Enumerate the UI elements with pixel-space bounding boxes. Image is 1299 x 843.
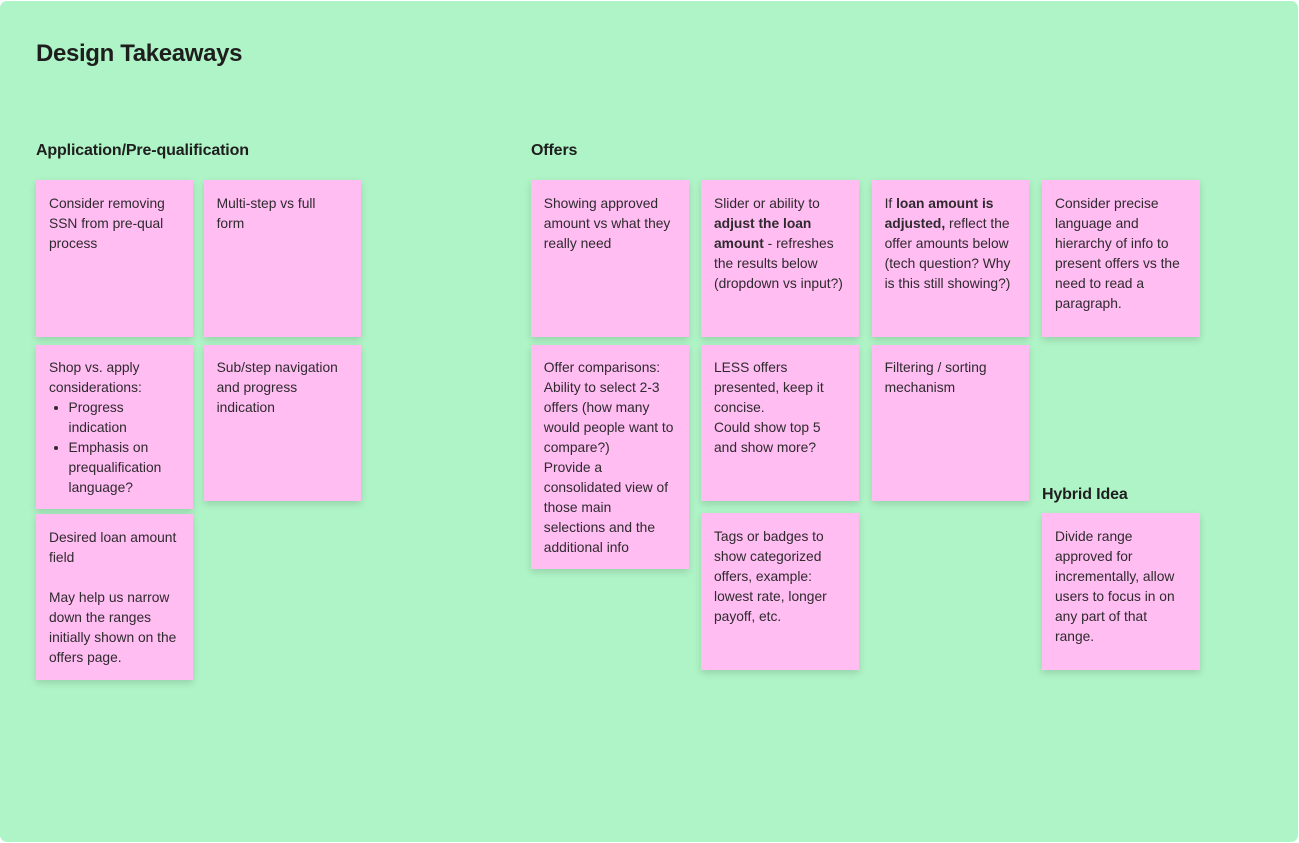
sticky: precise language: hierarchy of info to (1055, 236, 1169, 251)
sticky: less offers: concise. (714, 400, 765, 415)
sticky: offer comparisons (531, 344, 689, 569)
sticky: remove SSN: process (49, 236, 97, 251)
title: Design Takeaways (36, 40, 242, 67)
sticky: tags or badges: lowest rate, longer (714, 589, 827, 604)
sticky: loan amount adjusted: offer amounts below (885, 236, 1009, 251)
sticky: divide range: Divide range (1055, 529, 1132, 544)
sticky: slider (701, 180, 859, 337)
sticky: divide range: users to focus in on (1055, 589, 1175, 604)
heading: offers: Offers (531, 142, 577, 159)
sticky: tags or badges (701, 513, 859, 670)
sticky: slider: adjust the loan (714, 216, 811, 231)
sticky: slider: Slider or ability to (714, 196, 820, 211)
sticky: tags or badges: show categorized (714, 549, 821, 564)
sticky: multi-step: Multi-step vs full (217, 196, 316, 211)
sticky: loan amount adjusted: (tech question? Why (885, 256, 1010, 271)
sticky: desired loan amount: offers page. (49, 650, 122, 665)
sticky: divide range: incrementally, allow (1055, 569, 1174, 584)
sticky: filtering (872, 344, 1029, 501)
sticky: shop vs apply: Shop vs. apply (49, 360, 140, 375)
sticky: shop vs apply: language? (68, 480, 133, 495)
sticky: offer comparisons: additional info (544, 540, 629, 555)
sticky: shop vs apply: indication (68, 420, 127, 435)
sticky: approved amount: Showing approved (544, 196, 658, 211)
sticky: approved amount (531, 180, 689, 337)
sticky: approved amount: amount vs what they (544, 216, 670, 231)
sticky: desired loan amount: May help us narrow (49, 590, 169, 605)
sticky: divide range: range. (1055, 629, 1094, 644)
sticky: offer comparisons: selections and the (544, 520, 655, 535)
sticky: desired loan amount: Desired loan amount (49, 530, 176, 545)
sticky: loan amount adjusted: is this still showing?) (885, 276, 1010, 291)
sticky: sub/step navigation (204, 344, 361, 501)
sticky: sub/step navigation: and progress (217, 380, 297, 395)
sticky: precise language: Consider precise (1055, 196, 1159, 211)
sticky: remove SSN: SSN from pre-qual (49, 216, 163, 231)
sticky: less offers: presented, keep it (714, 380, 824, 395)
sticky: remove SSN (36, 180, 193, 337)
sticky: precise language: present offers vs the (1055, 256, 1180, 271)
sticky: offer comparisons: Provide a (544, 460, 602, 475)
sticky: shop vs apply: Emphasis on (68, 440, 148, 455)
sticky: slider: amount - refreshes (714, 236, 834, 251)
sticky: tags or badges: offers, example: (714, 569, 812, 584)
sticky: shop vs apply (36, 344, 193, 509)
sticky: offer comparisons: offers (how many (544, 400, 649, 415)
sticky: less offers (701, 344, 859, 501)
sticky: less offers: Could show top 5 (714, 420, 821, 435)
sticky: offer comparisons: would people want to (544, 420, 673, 435)
sticky: desired loan amount: initially shown on the (49, 630, 176, 645)
sticky: divide range: any part of that (1055, 609, 1147, 624)
sticky: divide range (1042, 513, 1200, 670)
sticky: shop vs apply: prequalification (68, 460, 161, 475)
sticky: desired loan amount: down the ranges (49, 610, 151, 625)
sticky: loan amount adjusted (872, 180, 1029, 337)
sticky: sub/step navigation: indication (217, 400, 275, 415)
sticky: precise language: paragraph. (1055, 296, 1122, 311)
sticky: tags or badges: Tags or badges to (714, 529, 824, 544)
sticky: offer comparisons: Offer comparisons: (544, 360, 660, 375)
sticky: precise language: need to read a (1055, 276, 1144, 291)
sticky: multi-step: form (217, 216, 244, 231)
sticky: filtering: Filtering / sorting (885, 360, 987, 375)
sticky: less offers: LESS offers (714, 360, 787, 375)
sticky: desired loan amount: field (49, 550, 74, 565)
sticky: offer comparisons: Ability to select 2-3 (544, 380, 660, 395)
heading: application: Application/Pre-qualification (36, 142, 249, 159)
sticky: tags or badges: payoff, etc. (714, 609, 781, 624)
heading: hybrid idea: Hybrid Idea (1042, 486, 1128, 503)
sticky: offer comparisons: those main (544, 500, 611, 515)
sticky: shop vs apply: considerations: (49, 380, 142, 395)
sticky: offer comparisons: compare?) (544, 440, 610, 455)
sticky: slider: the results below (714, 256, 818, 271)
sticky: offer comparisons: consolidated view of (544, 480, 668, 495)
sticky: divide range: approved for (1055, 549, 1132, 564)
sticky: shop vs apply: Progress (68, 400, 124, 415)
sticky: approved amount: really need (544, 236, 611, 251)
sticky: remove SSN: Consider removing (49, 196, 165, 211)
sticky: precise language (1042, 180, 1200, 337)
sticky: loan amount adjusted: If loan amount is (885, 196, 993, 211)
sticky: less offers: and show more? (714, 440, 816, 455)
sticky: loan amount adjusted: adjusted, reflect the (885, 216, 1010, 231)
sticky: sub/step navigation: Sub/step navigation (217, 360, 338, 375)
sticky: multi-step (204, 180, 361, 337)
sticky: precise language: language and (1055, 216, 1139, 231)
sticky: filtering: mechanism (885, 380, 955, 395)
sticky: slider: (dropdown vs input?) (714, 276, 843, 291)
sticky: desired loan amount (36, 514, 193, 680)
